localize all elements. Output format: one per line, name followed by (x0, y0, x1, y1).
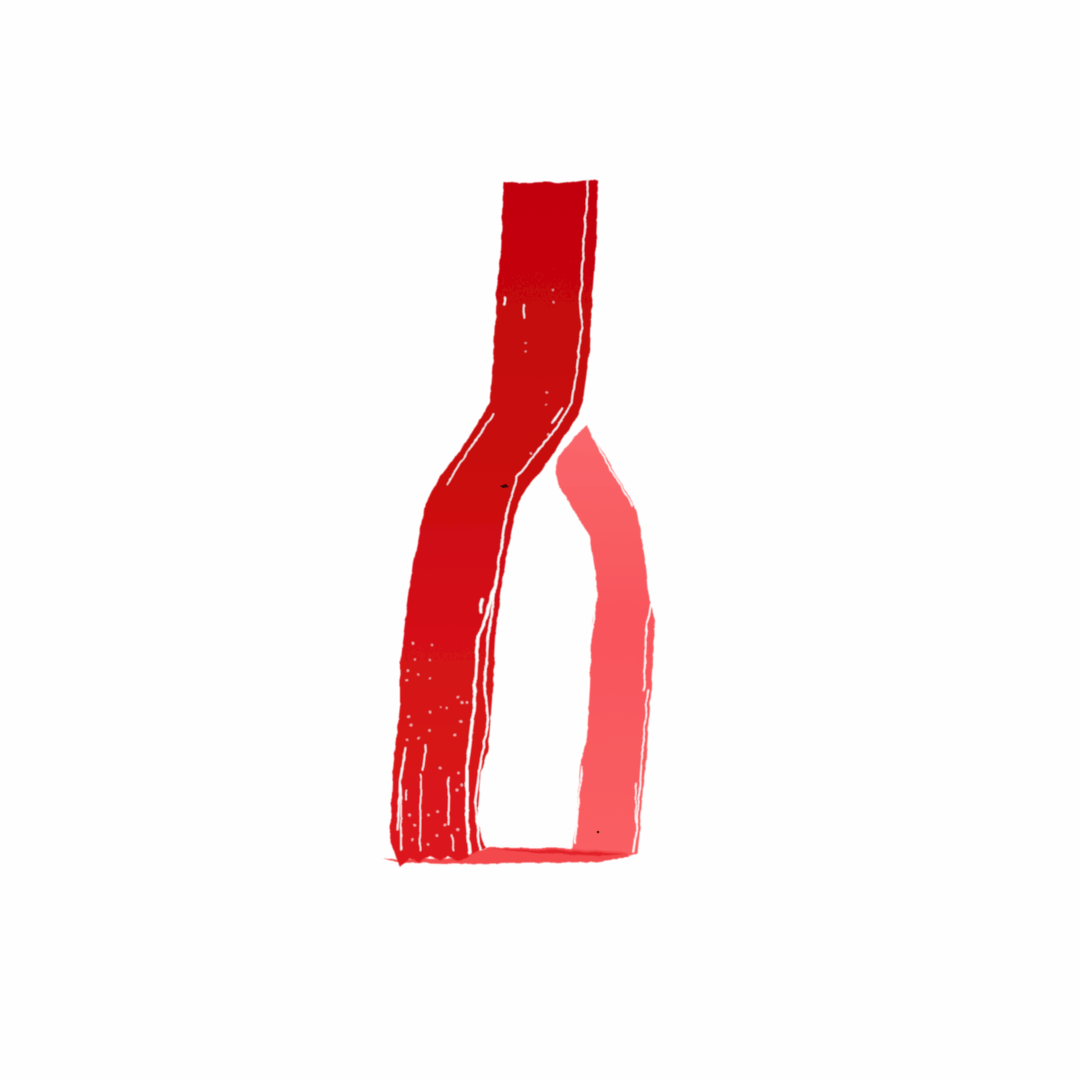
light stroke bristle gaps (575, 436, 653, 852)
dark red left stroke of bottle (390, 180, 598, 867)
dark stroke bristle gaps (398, 181, 588, 853)
base stroke of bottle (383, 848, 630, 864)
ink blot (500, 484, 509, 488)
ink spot on light stroke (597, 831, 599, 833)
dry-brush speckle (406, 289, 554, 846)
light red right stroke of bottle (556, 425, 655, 857)
